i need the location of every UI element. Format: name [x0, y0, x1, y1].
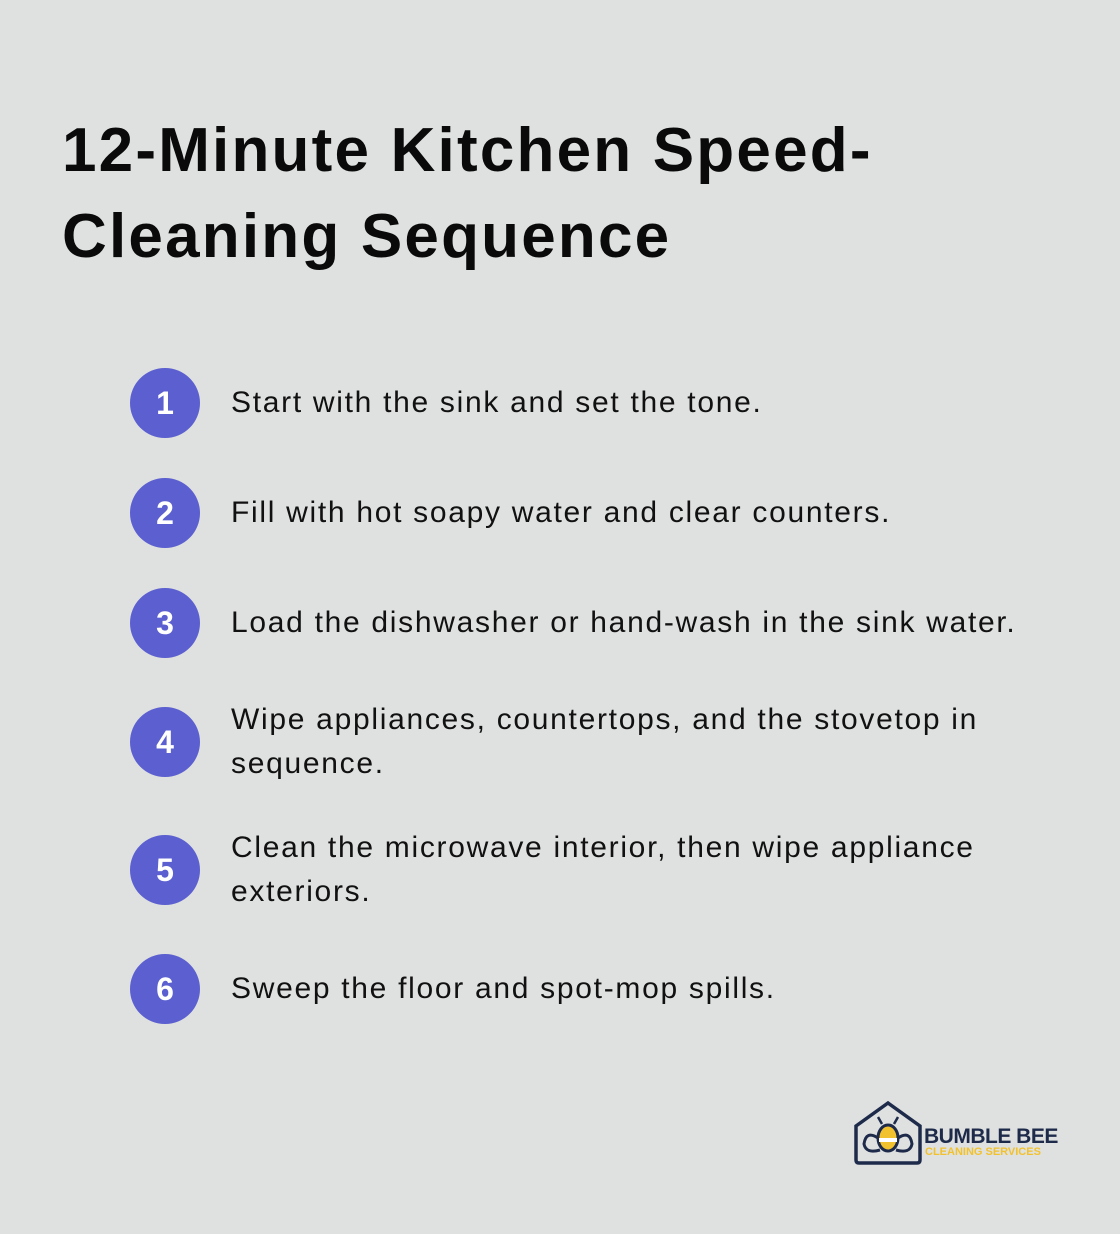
step 2 [130, 478, 891, 548]
step 1: Start with the sink and set the tone. [231, 386, 763, 419]
step 4: 4 [156, 724, 174, 760]
step 4: Wipe appliances, countertops, and the stovetop in sequence. [231, 703, 978, 780]
step 1 [130, 368, 763, 438]
logo [854, 1100, 1058, 1165]
logo: CLEANING SERVICES [925, 1146, 1041, 1158]
step 2: 2 [156, 495, 174, 531]
step 6: Sweep the floor and spot-mop spills. [231, 972, 776, 1005]
step 6 [130, 954, 776, 1024]
brand text: BUMBLE BEE [924, 1125, 1058, 1148]
step 3: Load the dishwasher or hand-wash in the sink water. [231, 606, 1016, 639]
step 3: 3 [156, 605, 174, 641]
step 2: Fill with hot soapy water and clear counters. [231, 496, 891, 529]
title: 12-Minute Kitchen Speed- [62, 116, 873, 185]
step 5: 5 [156, 852, 174, 888]
title: Cleaning Sequence [62, 202, 671, 271]
step 6: 6 [156, 971, 174, 1007]
step 1: 1 [156, 385, 174, 421]
title [62, 116, 873, 271]
step 5: Clean the microwave interior, then wipe appliance exteriors. [231, 831, 975, 908]
step 3 [130, 588, 1016, 658]
icon: bee house [854, 1100, 922, 1165]
